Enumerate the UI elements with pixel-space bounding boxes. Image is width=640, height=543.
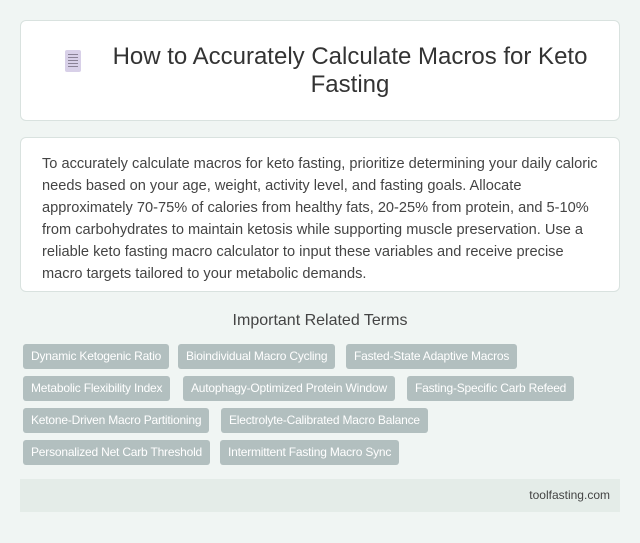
icon: receipt xyxy=(65,50,81,72)
tags: Electrolyte-Calibrated Macro Balance xyxy=(229,413,420,427)
tags: Fasting-Specific Carb Refeed xyxy=(415,381,566,395)
tags: Dynamic Ketogenic Ratio xyxy=(31,349,161,363)
title card xyxy=(20,20,620,121)
footer xyxy=(20,479,620,512)
tags: Autophagy-Optimized Protein Window xyxy=(191,381,387,395)
title: How to Accurately Calculate Macros for Keto Fasting xyxy=(113,43,587,98)
summary text: To accurately calculate macros for keto fasting, prioritize determining your daily caloric needs based on your age, weight, activity level, and fasting goals. Allocate approximately 70-75% of calories from healthy fats, 20-25% from protein, and 5-10% from carbohydrates to maintain ketosis while supporting muscle preservation. Use a reliable keto fasting macro calculator to input these variables and receive precise macro targets tailored to your metabolic demands. xyxy=(42,156,598,282)
footer source: toolfasting.com xyxy=(529,488,610,502)
tags: Ketone-Driven Macro Partitioning xyxy=(31,413,201,427)
tags: Personalized Net Carb Threshold xyxy=(31,445,202,459)
tags: Bioindividual Macro Cycling xyxy=(186,349,327,363)
summary card xyxy=(20,137,620,292)
tags: Fasted-State Adaptive Macros xyxy=(354,349,509,363)
tags: Intermittent Fasting Macro Sync xyxy=(228,445,391,459)
tags: Metabolic Flexibility Index xyxy=(31,381,162,395)
related terms heading: Important Related Terms xyxy=(233,312,407,329)
